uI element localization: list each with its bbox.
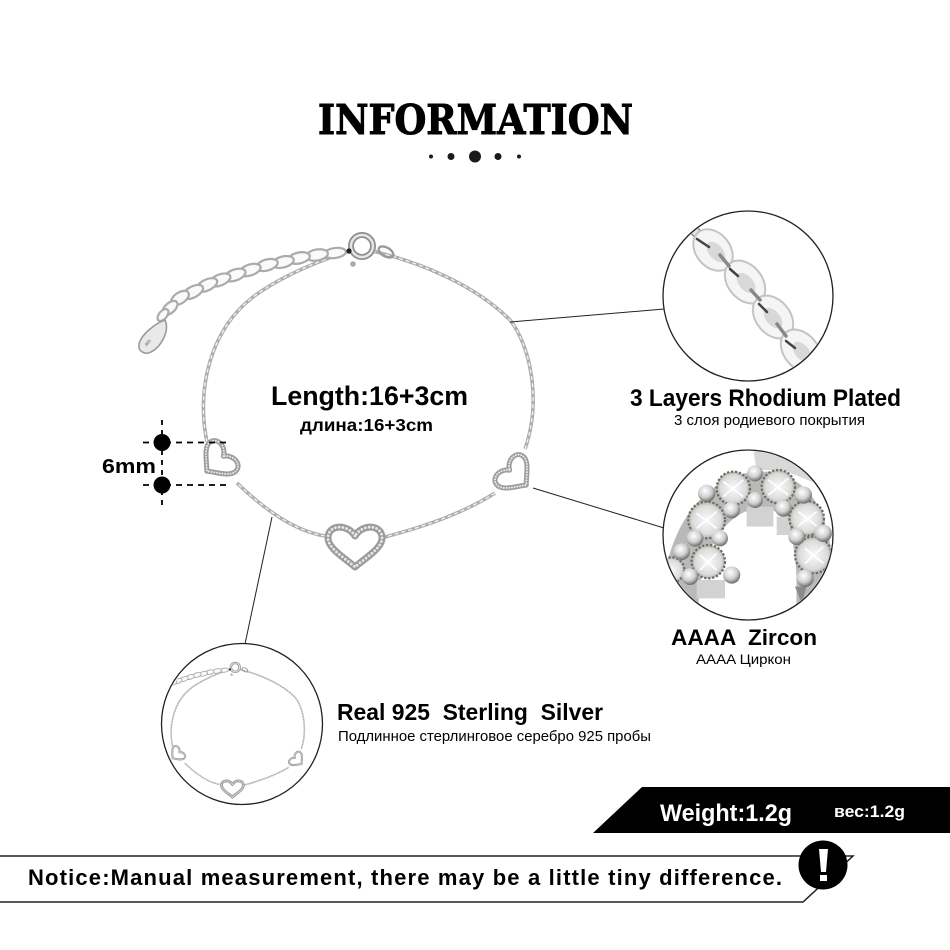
heading: sterling silver: Real 925 Sterling Silver [337, 699, 603, 725]
weight banner: Weight:1.2g [660, 800, 792, 827]
detail circle: chain links [663, 211, 833, 381]
notice bar [0, 856, 853, 902]
notice bar: Notice:Manual measurement, there may be a little tiny difference. [28, 865, 782, 890]
heading: zircon [671, 625, 817, 667]
weight banner: вес:1.2g [834, 803, 905, 821]
heading: rhodium plating: 3 слоя родиевого покрытия [674, 413, 865, 429]
icon: exclamation mark [798, 840, 848, 890]
leader lines [245, 309, 664, 644]
size dimension marker: 6mm [102, 420, 230, 507]
length label: Length:16+3cm [271, 381, 468, 411]
heading: sterling silver: Подлинное стерлинговое серебро 925 пробы [338, 729, 651, 745]
heading: zircon: AAAA Циркон [696, 652, 791, 667]
title: INFORMATION [318, 96, 633, 145]
heading: rhodium plating: 3 Layers Rhodium Plated [630, 385, 901, 412]
heading: zircon: AAAA Zircon [671, 625, 817, 650]
weight banner [593, 787, 950, 833]
detail circle: zircon stones [659, 450, 833, 627]
detail circle: whole bracelet [145, 644, 322, 804]
title dot divider [429, 150, 521, 162]
bracelet photo: .925 [143, 338, 152, 348]
heading: sterling silver [337, 699, 651, 745]
bracelet photo [139, 235, 539, 567]
length label: длина:16+3cm [300, 415, 433, 435]
heading: rhodium plating [630, 385, 901, 429]
length label [271, 381, 468, 435]
size dimension marker: 6mm: 6mm [102, 455, 156, 478]
